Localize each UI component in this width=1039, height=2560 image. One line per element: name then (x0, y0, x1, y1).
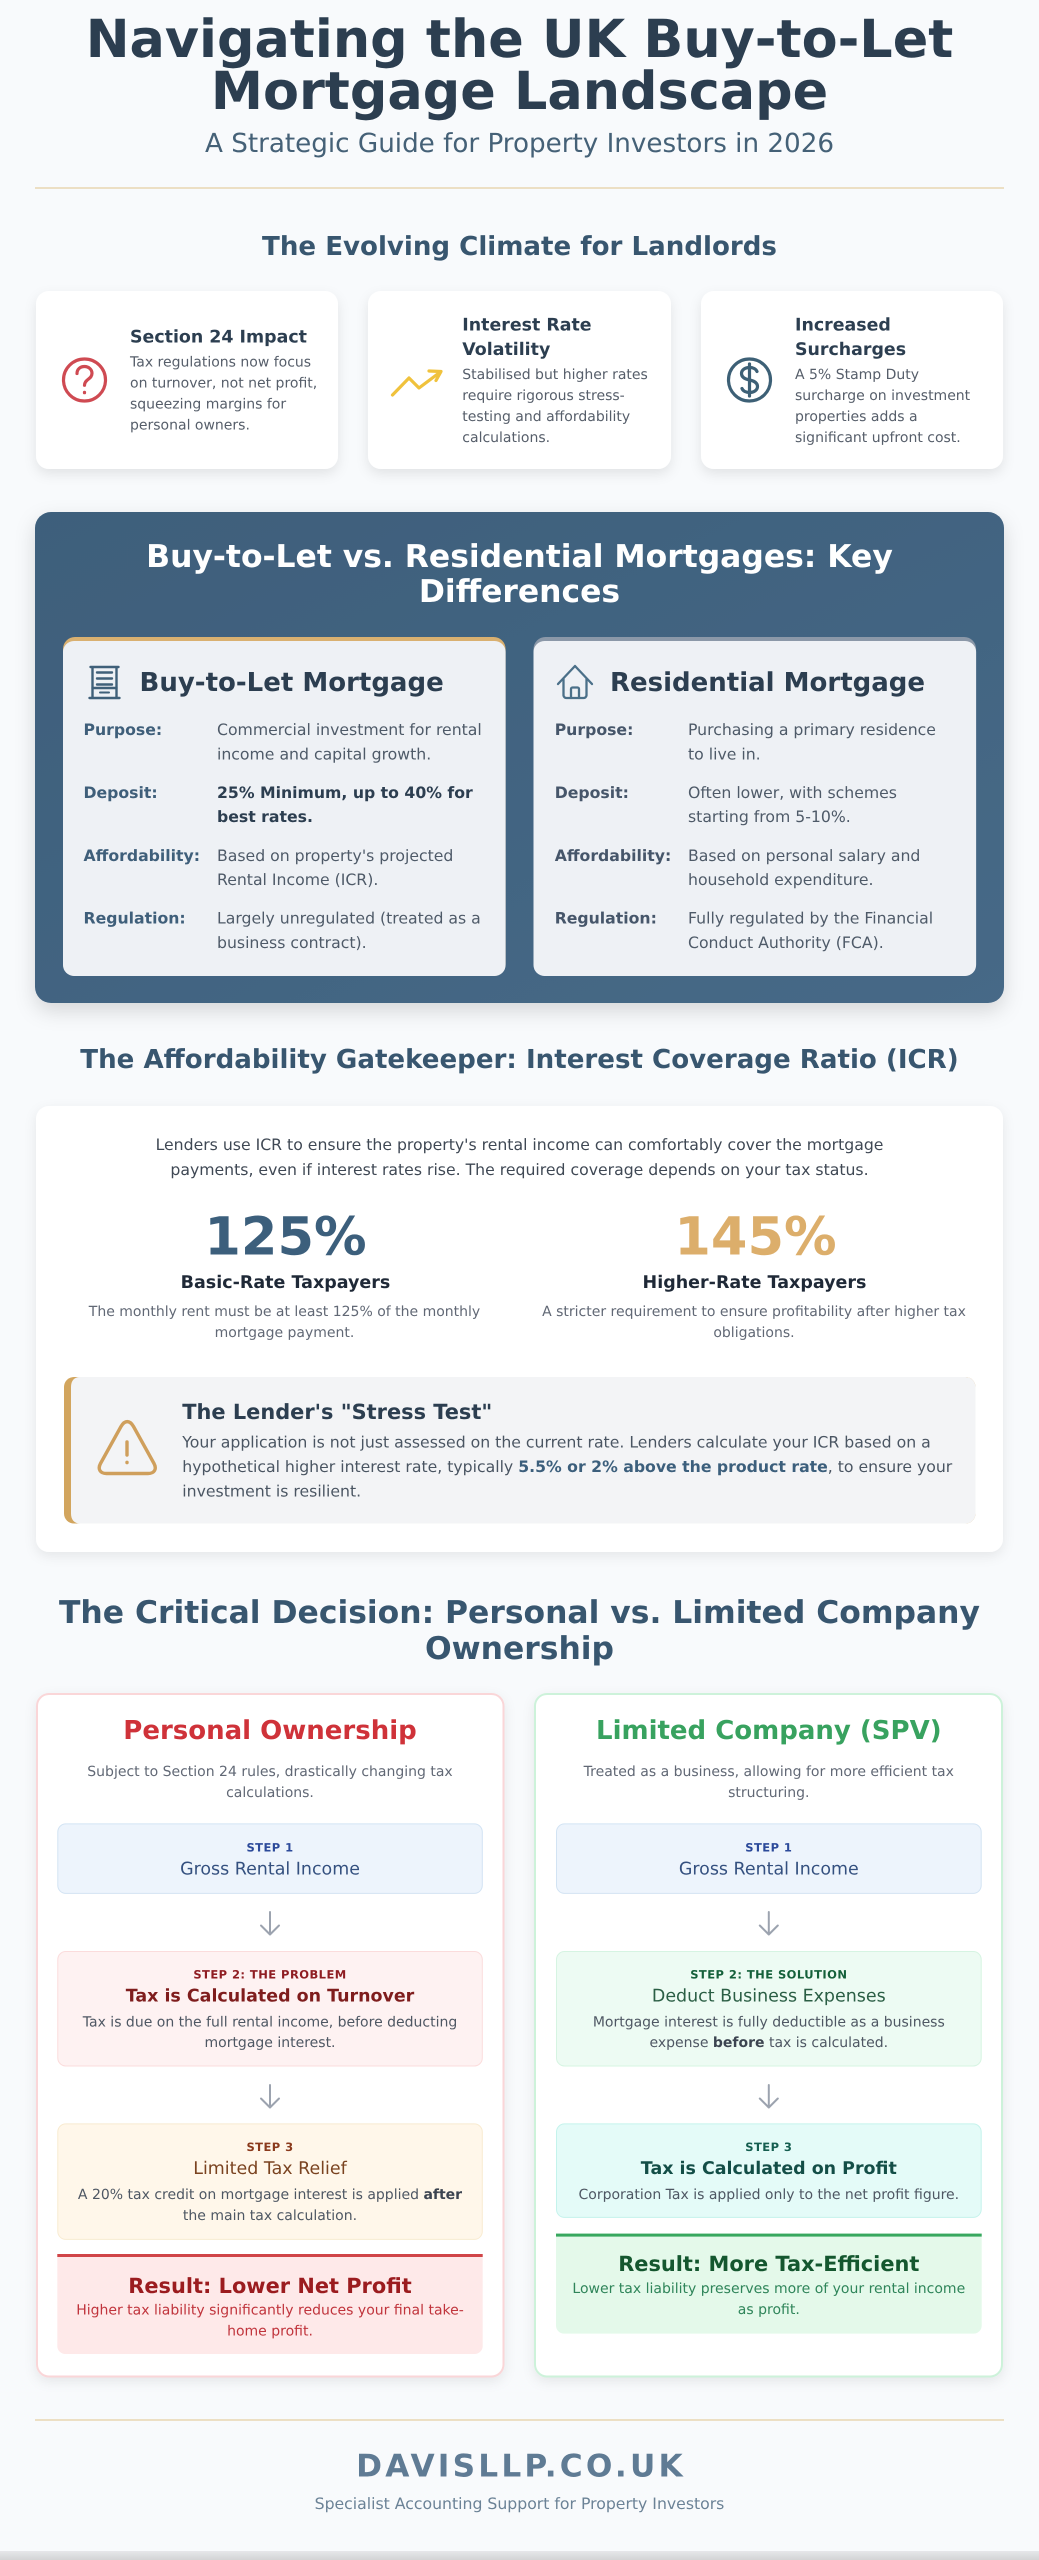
card text (462, 316, 648, 446)
comparison rows: Fully regulated by the Financial (688, 908, 933, 928)
icon: rising chart (392, 371, 441, 395)
result: Lower tax liability preserves more of your rental income (572, 2281, 965, 2297)
intro text: Lenders use ICR to ensure the property's rental income can comfortably cover the mortgage (156, 1135, 883, 1154)
step 2 (58, 1952, 482, 2066)
result (57, 2254, 483, 2354)
comparison rows: Affordability: (555, 846, 671, 865)
heading: ICR: The Affordability Gatekeeper: Interest Coverage Ratio (ICR) (80, 1045, 959, 1075)
comparison rows: business contract). (217, 933, 367, 952)
arrow (760, 2085, 778, 2108)
arrow (261, 1912, 279, 1934)
icon: house (558, 666, 592, 698)
callout text: investment is resilient. (182, 1481, 361, 1500)
stat: basic rate: Basic-Rate Taxpayers (181, 1273, 390, 1293)
panel title: Personal Ownership (123, 1716, 417, 1746)
step 2: Mortgage interest is fully deductible as a business (593, 2014, 945, 2030)
panel title: Limited Company (SPV) (596, 1716, 942, 1746)
comparison rows: Largely unregulated (treated as a (217, 908, 481, 928)
card text (795, 316, 971, 446)
panel: interest rate card (368, 291, 671, 469)
step 2: STEP 2: THE SOLUTION (690, 1968, 847, 1982)
step 3: STEP 3 (745, 2140, 792, 2154)
step 2: Deduct Business Expenses (652, 1986, 886, 2006)
arrow (760, 1912, 778, 1934)
comparison rows: Often lower, with schemes (688, 783, 897, 802)
card text: squeezing margins for (130, 397, 286, 413)
step 2: Tax is Calculated on Turnover (126, 1986, 415, 2006)
card text: A 5% Stamp Duty (795, 367, 919, 383)
panel: personal ownership (37, 1694, 504, 2376)
comparison rows: Regulation: (84, 908, 186, 928)
panel intro (87, 1764, 453, 1801)
icon: dollar (728, 359, 770, 401)
card text: Tax regulations now focus (129, 355, 311, 371)
comparison rows: Commercial investment for rental (217, 720, 482, 739)
comparison rows: Based on property's projected (217, 846, 453, 865)
tagline: Specialist Accounting Support for Property Investors (315, 2494, 724, 2513)
comparison rows: Conduct Authority (FCA). (688, 933, 884, 952)
panel: buy-to-let vs residential (35, 512, 1004, 1003)
card text: properties adds a (795, 409, 918, 425)
comparison rows: income and capital growth. (217, 744, 431, 763)
comparison rows: starting from 5-10%. (688, 807, 851, 826)
card text (129, 328, 317, 434)
result: home profit. (227, 2324, 313, 2340)
icon: question mark (64, 359, 106, 401)
comparison rows: household expenditure. (688, 870, 874, 889)
card text: Volatility (462, 340, 551, 360)
panel intro: Treated as a business, allowing for more efficient tax (583, 1764, 954, 1780)
comparison rows: 25% Minimum, up to 40% for (217, 783, 473, 802)
panel intro: calculations. (226, 1785, 314, 1801)
panel intro: structuring. (728, 1785, 809, 1801)
panel: residential mortgage (534, 637, 976, 976)
comparison rows: Purpose: (555, 720, 633, 739)
comparison rows: Purpose: (84, 720, 162, 739)
step 1 (58, 1824, 482, 1893)
step 1: STEP 1 (246, 1840, 294, 1854)
heading: evolving climate: The Evolving Climate for Landlords (262, 232, 777, 262)
stat: higher rate: obligations. (713, 1325, 795, 1341)
result: Result: More Tax-Efficient (618, 2252, 919, 2276)
step 2 (556, 1952, 981, 2066)
intro text (156, 1135, 883, 1179)
comparison rows: to live in. (688, 744, 761, 763)
arrow (261, 2085, 279, 2108)
footer (315, 2449, 724, 2513)
panel intro (583, 1764, 954, 1801)
card text: significant upfront cost. (795, 430, 961, 446)
comparison rows: Regulation: (555, 908, 657, 928)
card text: Section 24 Impact (130, 328, 307, 348)
heading: critical decision (59, 1595, 980, 1667)
panel: limited company (535, 1694, 1002, 2376)
panel: ICR (36, 1106, 1003, 1552)
panel: buy-to-let mortgage (63, 637, 506, 976)
comparison rows: Based on personal salary and (688, 846, 920, 865)
intro text: payments, even if interest rates rise. The required coverage depends on your tax status. (170, 1160, 869, 1179)
card text: Increased (795, 316, 891, 336)
header (86, 9, 953, 159)
heading: critical decision: The Critical Decision: Personal vs. Limited Company (59, 1595, 980, 1631)
card text: testing and affordability (462, 409, 630, 425)
step 3: Tax is Calculated on Profit (641, 2159, 897, 2179)
step 2: Tax is due on the full rental income, before deducting (82, 2014, 457, 2030)
card text: require rigorous stress- (462, 388, 625, 404)
card text: calculations. (462, 430, 550, 446)
comparison rows (555, 720, 936, 952)
panel: surcharges card (701, 291, 1003, 469)
stat: basic rate (88, 1206, 480, 1341)
card text: Stabilised but higher rates (462, 367, 648, 383)
step 3: the main tax calculation. (183, 2208, 357, 2224)
card text: Interest Rate (462, 316, 592, 336)
step 1: Gross Rental Income (679, 1859, 859, 1879)
card text: personal owners. (130, 418, 250, 434)
step 3: A 20% tax credit on mortgage interest is applied after (78, 2187, 462, 2203)
comparison rows: Rental Income (ICR). (217, 870, 378, 889)
heading: Differences (419, 574, 620, 610)
comparison rows: Purchasing a primary residence (688, 720, 936, 739)
title (86, 9, 953, 122)
stat: higher rate: A stricter requirement to ensure profitability after higher tax (542, 1304, 966, 1320)
icon: building (90, 667, 120, 698)
stat: basic rate: 125% (204, 1206, 367, 1268)
panel intro: Subject to Section 24 rules, drastically changing tax (87, 1764, 453, 1780)
heading (146, 539, 893, 610)
callout text: Your application is not just assessed on the current rate. Lenders calculate your ICR based on a (181, 1432, 931, 1452)
result: as profit. (738, 2302, 800, 2318)
step 3: Limited Tax Relief (193, 2159, 348, 2179)
panel: section 24 card (36, 291, 338, 469)
stat: basic rate: The monthly rent must be at least 125% of the monthly (88, 1304, 480, 1320)
card text: surcharge on investment (795, 388, 971, 404)
step 3 (58, 2124, 482, 2239)
step 3: Corporation Tax is applied only to the net profit figure. (579, 2187, 959, 2203)
comparison rows: best rates. (217, 807, 313, 826)
subtitle: A Strategic Guide for Property Investors in 2026 (205, 129, 834, 159)
title: Navigating the UK Buy-to-Let (86, 9, 953, 70)
brand: DAVISLLP.CO.UK (356, 2449, 686, 2485)
step 2: STEP 2: THE PROBLEM (193, 1968, 347, 1982)
card text: on turnover, not net profit, (130, 376, 317, 392)
result: Result: Lower Net Profit (128, 2274, 412, 2298)
icon: warning (99, 1422, 155, 1474)
comparison rows (84, 720, 482, 952)
card title: Residential Mortgage (610, 668, 925, 698)
callout text: hypothetical higher interest rate, typically 5.5% or 2% above the product rate, to ensure your (182, 1457, 953, 1476)
heading: Buy-to-Let vs. Residential Mortgages: Key (146, 539, 893, 575)
callout text: The Lender's "Stress Test" (182, 1400, 492, 1424)
title: Mortgage Landscape (211, 61, 828, 122)
step 2: expense before tax is calculated. (650, 2035, 888, 2051)
card text: Surcharges (795, 340, 906, 360)
comparison rows: Deposit: (84, 783, 158, 802)
step 2: mortgage interest. (204, 2035, 336, 2051)
callout: stress test (64, 1377, 976, 1524)
comparison rows: Affordability: (84, 846, 200, 865)
result (556, 2234, 982, 2334)
step 3: STEP 3 (246, 2140, 294, 2154)
step 3 (556, 2124, 981, 2217)
stat: higher rate: 145% (674, 1206, 837, 1268)
stat: higher rate: Higher-Rate Taxpayers (643, 1273, 866, 1293)
comparison rows: Deposit: (555, 783, 629, 802)
step 1 (556, 1824, 981, 1893)
step 1: STEP 1 (745, 1840, 792, 1854)
heading: critical decision: Ownership (425, 1631, 614, 1667)
callout text (181, 1400, 953, 1500)
step 1: Gross Rental Income (180, 1859, 360, 1879)
card title: Buy-to-Let Mortgage (140, 668, 444, 698)
result: Higher tax liability significantly reduces your final take- (76, 2303, 464, 2319)
stat: higher rate (542, 1206, 966, 1341)
stat: basic rate: mortgage payment. (215, 1325, 354, 1341)
